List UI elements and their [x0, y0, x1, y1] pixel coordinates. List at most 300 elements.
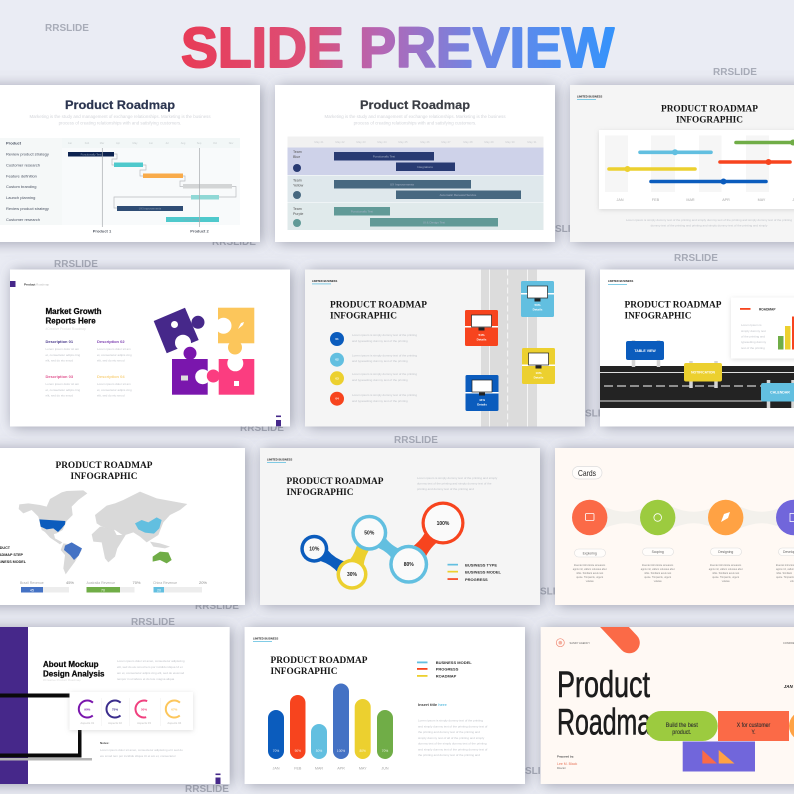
numbered list: 04	[335, 397, 339, 401]
main heading	[558, 670, 650, 735]
numbered list: 03	[335, 376, 339, 380]
slide heading: Product Roadmap	[360, 98, 470, 112]
slide heading: Market Growth	[46, 307, 102, 316]
slide description: printing and dummy text of the printing and	[417, 487, 474, 491]
sign: notification: NOTIFICATION	[691, 370, 715, 374]
gauges card: 75%	[112, 708, 118, 712]
panel: puzzle slide	[10, 270, 290, 426]
gantt chart: May	[133, 141, 138, 145]
milestone labels: Product 2	[190, 228, 209, 234]
progress chain: 10%	[309, 546, 320, 552]
sign: light blue	[521, 281, 554, 317]
vertical road	[481, 270, 537, 426]
milestone labels	[93, 228, 209, 234]
descriptions: elit, sed do eiu smod	[46, 358, 73, 362]
pill bar chart: FEB	[294, 766, 302, 770]
sign: blue: Details	[477, 402, 487, 406]
team timeline chart: Blue	[293, 155, 300, 159]
slide brand: Product Roadmap	[24, 282, 50, 286]
panel: highway slide: INFOGRAPHIC	[624, 312, 692, 322]
step: developing: nibis. Similiant	[776, 572, 792, 575]
descriptions	[46, 339, 132, 398]
gantt chart: UI/UX Design	[184, 218, 201, 222]
step: designing: agnis mil, vallum volustes abut	[709, 568, 743, 571]
sign: calendar: CALENDAR	[770, 390, 790, 394]
presenter: Director	[557, 767, 566, 770]
numbered list: and typesetting dummy text of the printing	[352, 399, 408, 403]
watermarks: RRSLIDE	[131, 617, 175, 628]
gantt chart: Launch planning	[6, 195, 35, 200]
step: developing	[776, 500, 794, 583]
numbered list: Lorem ipsum is simply dummy text of the printing	[352, 393, 417, 397]
slide description: Lorem ipsum dolor sit amet, consectetur adipiscing	[117, 659, 185, 663]
step: developing: quote. Timparcis	[776, 576, 794, 579]
slide heading: PRODUCT ROADMAP	[270, 656, 368, 666]
slide description	[417, 476, 498, 491]
watermarks: RRSLIDE	[195, 601, 239, 612]
timeline card: MAR	[686, 198, 695, 202]
gantt chart: Nov	[229, 141, 234, 145]
team timeline chart: Team	[293, 178, 302, 182]
revenue bars	[20, 580, 207, 592]
team timeline chart: Automatic Renewal Service	[440, 193, 477, 197]
descriptions: Description 01	[46, 339, 74, 344]
paragraph: and simply dummy text of the printing dummy text of	[418, 724, 488, 728]
panel: title slide	[541, 619, 794, 784]
pill bar chart: 70%	[273, 749, 279, 753]
revenue bars: 20	[157, 588, 161, 592]
panel: gantt roadmap slide	[0, 85, 260, 242]
brand mark	[216, 774, 220, 784]
step: designing: quote. Timparcis, urgent	[712, 576, 739, 579]
slide description: elit, sed do eiu smod tem por incididu idiqua Ut et	[117, 665, 183, 669]
legend card: typesetting dummy	[741, 340, 767, 344]
numbered list: and typesetting dummy text of the printing	[352, 359, 408, 363]
gantt chart: UX Improvements	[139, 206, 162, 210]
team timeline chart: May 29	[484, 140, 494, 144]
descriptions: Lorem ipsum dolor sit am	[46, 347, 80, 351]
team timeline chart: UX Improvements	[390, 182, 414, 186]
team timeline chart: Team	[293, 150, 302, 154]
purple side band	[0, 627, 28, 784]
main heading: Product	[557, 664, 651, 705]
paragraph: the printing and dummy text of the printing and	[418, 753, 480, 757]
step: scoping: Scoping	[652, 550, 664, 554]
paragraph: and simply dummy text of the printing dummy text of	[418, 747, 488, 751]
slide description	[29, 114, 211, 126]
card: orange: X for customer	[737, 722, 771, 729]
sign: calendar	[761, 380, 794, 408]
milestone labels: Product 1	[93, 228, 112, 234]
numbered list: Lorem ipsum is simply dummy text of the printing	[352, 333, 417, 337]
laptop mockup	[0, 694, 92, 760]
gantt chart: Feb	[85, 141, 90, 145]
corner marker	[10, 281, 16, 287]
notes: Lorem ipsum dolor sit amet, consectetur adipiscing el it sed do	[100, 748, 183, 752]
panel: world map slide	[0, 448, 245, 605]
slide heading: PRODUCT ROADMAP	[56, 461, 153, 471]
pill bar chart: MAY	[359, 766, 367, 770]
sign: notification	[684, 361, 722, 388]
slide brand: LIMITED BUSINESS	[577, 94, 602, 98]
legend card: simply dummy text	[741, 329, 766, 333]
numbered list	[330, 332, 417, 406]
gauges card: Aspects 04	[167, 721, 182, 725]
team timeline chart: May 30	[505, 140, 515, 144]
world map	[19, 490, 187, 574]
sign: blue	[466, 375, 498, 411]
watermarks: RRSLIDE	[540, 224, 585, 235]
team timeline chart: Team	[293, 207, 302, 211]
descriptions: Description 03	[46, 374, 74, 379]
sign: red: Details	[477, 338, 487, 342]
card: orange: Y.	[752, 729, 756, 736]
progress chain: 80%	[404, 562, 414, 568]
panel: progress chain slide	[260, 448, 540, 605]
panel: progress chain slide: INFOGRAPHIC	[286, 488, 354, 498]
slide heading: About Mockup	[43, 660, 99, 669]
slide heading: Design Analysis	[43, 670, 105, 678]
card: green pill: Build the best	[666, 722, 698, 729]
chart legend: PROGRESS	[436, 666, 459, 672]
progress chain	[300, 502, 464, 590]
orange rounded bar	[607, 619, 629, 643]
pill bar chart: MAR	[315, 766, 323, 770]
watermarks: RRSLIDE	[510, 766, 555, 777]
panel: team roadmap slide	[275, 85, 555, 242]
watermarks: RRSLIDE	[54, 259, 98, 270]
step: exploring: nibis. Similiant acuis iust	[576, 572, 604, 575]
main heading: Roadmap	[557, 702, 665, 742]
gantt chart: Apr	[116, 141, 120, 145]
slide heading: INFOGRAPHIC	[676, 116, 743, 126]
slide heading: PRODUCT ROADMAP	[330, 300, 427, 310]
gantt chart: Custom branding	[6, 184, 36, 189]
revenue bars: 70%	[132, 580, 141, 585]
slide description: dummy text of the printing and simply dummy text of the	[417, 482, 492, 486]
insert title: Insert title here	[418, 702, 447, 707]
slide heading	[46, 307, 102, 326]
slide description: process of creating relationships with and satisfying customers.	[354, 120, 476, 126]
sign: red	[465, 310, 498, 346]
presenter: Lee M. Black	[557, 762, 577, 766]
step: scoping: agnis mil, vallum volustes abut	[641, 568, 675, 571]
watermarks: RRSLIDE	[240, 423, 284, 434]
sign: yellow	[522, 348, 555, 384]
paragraph: dummy text of the simply dummy text of the printing	[418, 742, 487, 746]
descriptions: Description 02	[97, 339, 125, 344]
paragraph: simply dummy text of all of the printing and simply	[418, 736, 485, 740]
step: exploring	[572, 500, 607, 583]
paragraph: the printing and dummy text of the printing and	[418, 730, 480, 734]
descriptions: Lorem ipsum dolor sit am	[97, 347, 131, 351]
gantt chart: Functionally Test	[81, 152, 102, 156]
notes: Notes:	[100, 741, 109, 745]
card: yellow circle	[789, 711, 794, 741]
panel: road signs slide	[305, 270, 585, 426]
slide heading: Product Roadmap	[65, 98, 175, 112]
panel: bar chart slide: INFOGRAPHIC	[270, 667, 338, 677]
step: scoping: Eveniet inimcioste ameanos	[642, 564, 674, 567]
slide heading: PRODUCT ROADMAP	[286, 477, 384, 487]
progress chain: 100%	[437, 521, 450, 527]
team timeline chart: May 24	[377, 140, 387, 144]
timeline card	[599, 130, 794, 209]
slide heading: Reports Here	[46, 316, 96, 326]
pill bar chart: JUN	[381, 766, 389, 770]
gantt chart: Customer research	[6, 217, 40, 222]
gantt chart: Jul	[165, 141, 169, 145]
team timeline chart: May 25	[398, 140, 408, 144]
sign: table view: TABLE VIEW	[634, 349, 656, 353]
descriptions: elit, sed do eiu smod	[46, 394, 73, 398]
numbered list: 02	[335, 358, 339, 362]
team timeline chart: Yellow	[293, 184, 304, 188]
gauges card	[70, 692, 193, 730]
slide heading	[661, 104, 758, 126]
legend card: ROADMAP	[759, 308, 776, 312]
sign: light blue: 50%	[534, 303, 541, 307]
team timeline chart: May 28	[463, 140, 473, 144]
agency logo	[556, 639, 590, 647]
slide brand	[253, 636, 278, 642]
step: exploring: volutas	[586, 580, 594, 583]
pill bar chart: 70%	[382, 749, 388, 753]
gantt chart: Sep	[197, 141, 202, 145]
agency logo: SANDY AGENCY	[570, 641, 590, 645]
descriptions: Description 04	[97, 374, 125, 379]
step: scoping: quote. Timparcis, urgent	[644, 576, 671, 579]
descriptions: Lorem ipsum dolor sit am	[97, 382, 131, 386]
watermarks: RRSLIDE	[45, 23, 89, 34]
presenter: Prepared by:	[557, 754, 574, 758]
slide heading: PRODUCT ROADMAP	[661, 104, 758, 114]
progress chain: 50%	[364, 530, 375, 536]
descriptions: Lorem ipsum dolor sit am	[46, 382, 80, 386]
pill bar chart: 90%	[295, 749, 301, 753]
card: green pill: product.	[672, 729, 691, 736]
card: green pill	[646, 711, 718, 741]
step: exploring: Eveniet inimcioste ameanos	[574, 564, 606, 567]
panel: mockup analysis slide	[0, 627, 230, 784]
watermarks: RRSLIDE	[526, 586, 570, 598]
slide description: tempor in ut labore et do lore magna aliqua	[117, 677, 175, 681]
timeline card: FEB	[652, 198, 660, 202]
panel: road signs slide: INFOGRAPHIC	[330, 312, 397, 322]
slide caption: Lorem ipsum is simply dummy text of the printing and simply dummy text of the printing and simply dummy text of the printing	[626, 218, 792, 222]
slide caption	[626, 218, 792, 228]
numbered list: Lorem ipsum is simply dummy text of the printing	[352, 354, 417, 358]
numbered list: and typesetting dummy text of the printing	[352, 378, 408, 382]
team timeline chart: May 31	[527, 140, 537, 144]
gauges card: 50%	[141, 708, 147, 712]
slide heading	[56, 461, 153, 482]
slide subheading: #Creative Product Roadmap	[43, 678, 81, 682]
brand mark	[276, 416, 281, 426]
gauges card: 90%	[84, 708, 91, 712]
sign: light blue: Details	[533, 308, 543, 312]
timeline card: JAN	[617, 198, 624, 202]
revenue bars: 45	[30, 588, 34, 592]
legend card: text of the printing	[741, 346, 765, 350]
gantt chart: Jun	[149, 141, 154, 145]
pill bar chart: JAN	[273, 766, 280, 770]
descriptions: et, consectetur adipis cing	[46, 388, 81, 392]
gauges card: 67%	[171, 708, 178, 712]
slide description: process of creating relationships with and satisfying customers.	[59, 120, 181, 126]
gantt chart: Customer research	[6, 162, 40, 168]
descriptions: elit, sed do eiu smod	[97, 394, 125, 398]
chain legend: PROGRESS	[465, 577, 488, 582]
slide brand	[267, 458, 292, 463]
gantt chart	[0, 138, 240, 227]
gantt chart: Oct	[213, 141, 217, 145]
descriptions: et, consectetur adipis cing	[97, 353, 132, 357]
gauges card: Aspects 03	[137, 721, 151, 725]
slide subheading: #Creative Product Roadmap	[46, 327, 86, 331]
highway	[600, 366, 794, 408]
chart legend: ROADMAP	[436, 674, 457, 678]
step: designing: Eveniet inimcioste ameanos	[710, 564, 742, 567]
panel: bar chart slide	[245, 627, 525, 784]
chart legend	[417, 660, 472, 678]
timeline card: APR	[722, 198, 730, 202]
pill bar chart	[268, 684, 393, 770]
card: purple	[683, 742, 755, 772]
step: scoping: volutas	[654, 580, 662, 583]
chain legend: BUSINESS TYPE	[465, 562, 497, 567]
numbered list: and typesetting dummy text of the printing	[352, 339, 408, 343]
slide brand: LIMITED BUSINESS	[267, 458, 292, 462]
watermarks: RRSLIDE	[674, 253, 718, 264]
team timeline chart: May 26	[420, 140, 430, 144]
slide description	[324, 114, 506, 126]
slide heading: PRODUCT ROADMAP	[624, 300, 722, 310]
team timeline chart: Purple	[293, 212, 303, 216]
descriptions: et, consectetur adipis cing	[97, 388, 132, 392]
legend card	[731, 298, 794, 358]
chart legend: BUSINESS MODEL	[436, 660, 472, 665]
slide brand	[312, 279, 337, 284]
timeline card: MAY	[758, 198, 766, 202]
revenue bars: Brazil Revenue	[20, 581, 44, 585]
step: scoping	[640, 500, 675, 583]
slide caption: dummy text of the printing and printing and simply dummy text of the printing and simply	[651, 224, 768, 228]
panel: cards slide	[555, 448, 794, 605]
watermarks: RRSLIDE	[570, 408, 615, 420]
slide heading: INFOGRAPHIC	[70, 472, 138, 482]
legend card: Lorem Ipsum is	[741, 323, 762, 327]
numbered list: Lorem ipsum is simply dummy text of the printing	[352, 372, 417, 376]
numbered list: 01	[335, 337, 339, 341]
slide description: Marketing is the study and management of exchange relationships. Marketing is the business	[324, 114, 506, 119]
gantt chart: Review product strategy	[6, 206, 49, 211]
step: designing: nibis. Similiant acuis iust	[712, 572, 740, 575]
team timeline chart: May 23	[356, 140, 366, 144]
pill bar chart: 50%	[316, 749, 322, 753]
team timeline chart: May 21	[314, 140, 324, 144]
notes: eiu smod tem por incididu idiqua Ut et am et, consectetur	[100, 754, 176, 758]
paragraph: Lorem ipsum is simply dummy text of the printing	[418, 718, 483, 722]
slide brand	[577, 94, 602, 100]
team timeline chart: Functionally Test	[351, 210, 373, 214]
slide brand: LIMITED BUSINESS	[312, 279, 337, 283]
step: exploring: quote. Timparcis, urgent	[576, 576, 603, 579]
gantt chart: Mar	[100, 141, 104, 145]
gantt chart: Product	[6, 140, 22, 146]
gantt chart: Review product strategy	[6, 152, 49, 156]
slide description: Marketing is the study and management of exchange relationships. Marketing is the business	[29, 114, 211, 119]
paragraph	[418, 718, 488, 757]
sign: blue: 44%	[479, 398, 485, 402]
step: exploring: agnis mil, vallum volustes abut	[573, 568, 607, 571]
chain legend	[448, 562, 502, 582]
panel: timeline infographic slide	[570, 85, 794, 242]
slide description	[117, 659, 185, 681]
cards label: Cards	[578, 468, 596, 478]
presenter	[557, 754, 577, 770]
watermarks: RRSLIDE	[212, 237, 256, 248]
team timeline chart: UI & Design Test	[423, 220, 445, 224]
process connector band	[600, 505, 786, 530]
slide brand: LIMITED BUSINESS	[253, 636, 278, 640]
card: orange	[718, 711, 789, 741]
sign: yellow: 10%	[535, 371, 542, 375]
step: designing: Designing	[718, 550, 733, 554]
slide brand	[608, 279, 633, 285]
step: designing	[708, 500, 743, 583]
team timeline chart: Functionally Test	[373, 154, 395, 158]
title: SLIDE PREVIEW	[181, 16, 614, 80]
revenue bars: China Revenue	[153, 581, 177, 585]
chain legend: BUSINESS MODEL	[465, 570, 502, 574]
descriptions: et, consectetur adipis cing	[46, 353, 81, 357]
team timeline chart	[288, 136, 544, 230]
team timeline chart: May 22	[335, 140, 345, 144]
revenue bars: 45%	[66, 580, 74, 585]
sign: table view	[626, 340, 664, 367]
watermarks: RRSLIDE	[394, 435, 438, 446]
panel: highway slide	[600, 270, 794, 426]
progress chain: 30%	[347, 572, 358, 578]
slide brand: LIMITED BUSINESS	[608, 279, 633, 283]
gauges card: Aspects 01	[80, 721, 95, 725]
cards label	[572, 466, 602, 479]
slide description: Lorem ipsum is simply dummy text of the printing and simply	[417, 476, 498, 480]
pill bar chart: 80%	[360, 749, 366, 753]
gantt chart: Aug	[181, 141, 186, 145]
sign: red: 54%	[478, 333, 485, 337]
watermarks: RRSLIDE	[713, 67, 757, 78]
revenue bars: 20%	[199, 580, 207, 585]
slide description: am et, consectetur adipis cing elit, sed do eiusmod	[117, 671, 185, 675]
slide heading	[43, 660, 105, 678]
puzzle graphic	[154, 308, 254, 395]
notes	[100, 741, 183, 758]
map legend	[0, 546, 27, 564]
gauges card: Aspects 02	[108, 721, 122, 725]
team timeline chart: May 27	[441, 140, 451, 144]
gantt chart: Jan	[68, 141, 73, 145]
revenue bars: Australia Revenue	[86, 581, 115, 585]
descriptions: elit, sed do eiu smod	[97, 358, 125, 362]
legend card: of the printing and	[741, 334, 765, 338]
step: designing: volutas	[722, 580, 730, 583]
step: developing: agnis mil, vallum	[776, 568, 794, 571]
step: scoping: nibis. Similiant acuis iust	[644, 572, 672, 575]
pill bar chart: APR	[337, 766, 345, 770]
step: exploring: Exploring	[583, 552, 597, 556]
